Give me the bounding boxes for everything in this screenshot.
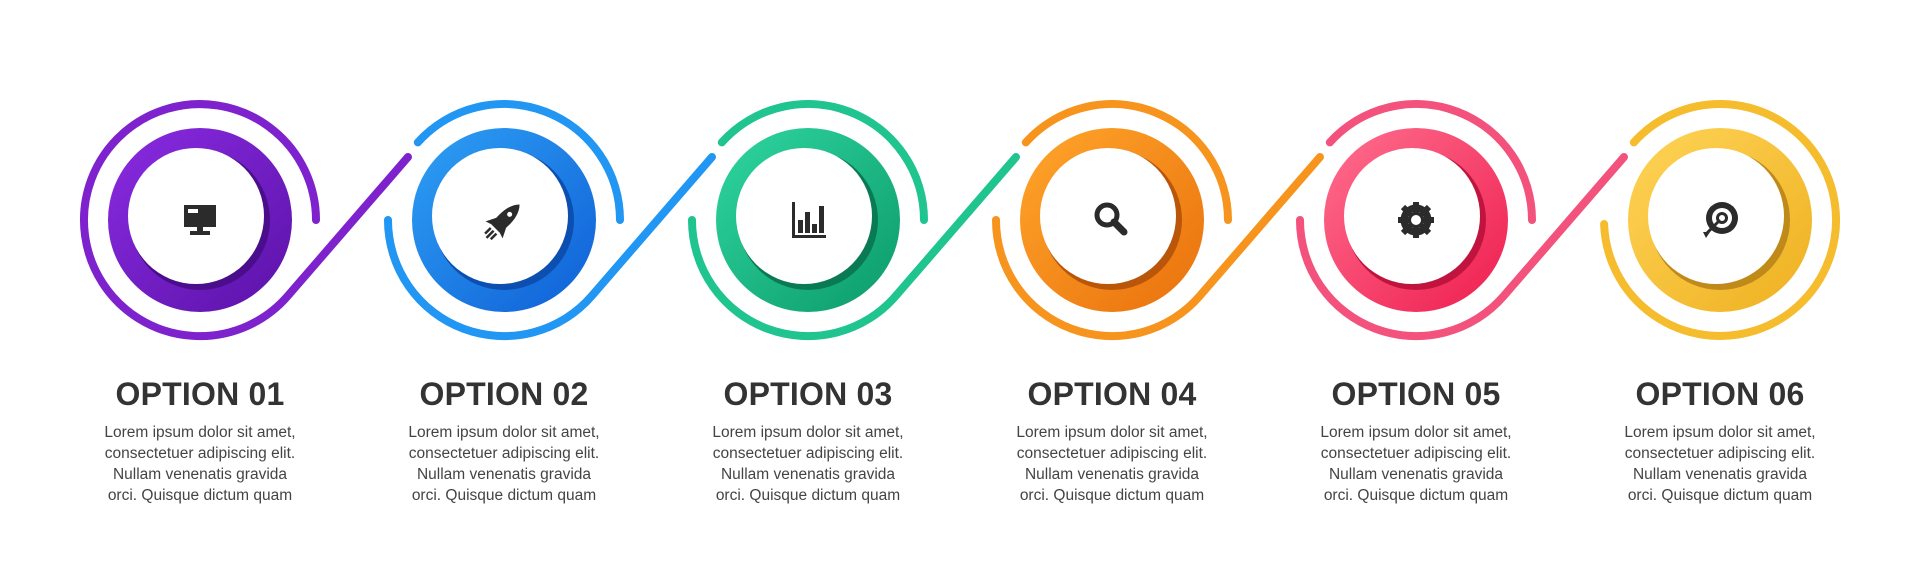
text: option 04: Lorem ipsum dolor sit amet, bbox=[1016, 424, 1208, 441]
icon: magnifier bbox=[1097, 205, 1124, 232]
text: option 04: Nullam venenatis gravida bbox=[1025, 466, 1199, 483]
text: option 06: Lorem ipsum dolor sit amet, bbox=[1624, 424, 1816, 441]
text: option 06: OPTION 06 bbox=[1636, 376, 1804, 412]
text: option 04 bbox=[1016, 376, 1208, 504]
text: option 04: OPTION 04 bbox=[1028, 376, 1196, 412]
text: option 01: Nullam venenatis gravida bbox=[113, 466, 287, 483]
ring 1 bbox=[108, 128, 292, 312]
text: option 05: Lorem ipsum dolor sit amet, bbox=[1320, 424, 1512, 441]
connector arcs 5 bbox=[1300, 104, 1624, 336]
text: option 02: Lorem ipsum dolor sit amet, bbox=[408, 424, 600, 441]
text: option 02 bbox=[408, 376, 600, 504]
icon: bar chart bbox=[792, 202, 826, 238]
text: option 02: Nullam venenatis gravida bbox=[417, 466, 591, 483]
text: option 01 bbox=[104, 376, 296, 504]
ring 4 bbox=[1020, 128, 1204, 312]
icon: target bbox=[1703, 202, 1738, 238]
text: option 04: orci. Quisque dictum quam bbox=[1020, 487, 1204, 504]
text: option 03: Lorem ipsum dolor sit amet, bbox=[712, 424, 904, 441]
text: option 03 bbox=[712, 376, 904, 504]
text: option 05: orci. Quisque dictum quam bbox=[1324, 487, 1508, 504]
connector arc 1 bbox=[84, 104, 408, 336]
text: option 06: orci. Quisque dictum quam bbox=[1628, 487, 1812, 504]
ring 3 bbox=[716, 128, 900, 312]
connector arcs 3 bbox=[692, 104, 1016, 336]
text: option 03: consectetuer adipiscing elit. bbox=[713, 445, 903, 462]
text: option 03: Nullam venenatis gravida bbox=[721, 466, 895, 483]
connector arc 6 bbox=[1604, 104, 1836, 336]
connector arcs 2 bbox=[388, 104, 712, 336]
connector arcs 4 bbox=[996, 104, 1320, 336]
text: option 06 bbox=[1624, 376, 1816, 504]
text: option 06: consectetuer adipiscing elit. bbox=[1625, 445, 1815, 462]
icon: monitor bbox=[184, 205, 216, 235]
text: option 04: consectetuer adipiscing elit. bbox=[1017, 445, 1207, 462]
text: option 01: OPTION 01 bbox=[116, 376, 284, 412]
text: option 03: orci. Quisque dictum quam bbox=[716, 487, 900, 504]
text: option 06: Nullam venenatis gravida bbox=[1633, 466, 1807, 483]
text: option 02: consectetuer adipiscing elit. bbox=[409, 445, 599, 462]
text: option 05: consectetuer adipiscing elit. bbox=[1321, 445, 1511, 462]
text: option 02: orci. Quisque dictum quam bbox=[412, 487, 596, 504]
text: option 05: Nullam venenatis gravida bbox=[1329, 466, 1503, 483]
text: option 01: consectetuer adipiscing elit. bbox=[105, 445, 295, 462]
text: option 02: OPTION 02 bbox=[420, 376, 588, 412]
text: option 03: OPTION 03 bbox=[724, 376, 892, 412]
text: option 05 bbox=[1320, 376, 1512, 504]
icon: gear bbox=[1398, 202, 1434, 238]
ring 5 bbox=[1324, 128, 1508, 312]
ring 2 bbox=[412, 128, 596, 312]
text: option 01: orci. Quisque dictum quam bbox=[108, 487, 292, 504]
text: option 01: Lorem ipsum dolor sit amet, bbox=[104, 424, 296, 441]
text: option 05: OPTION 05 bbox=[1332, 376, 1500, 412]
icon: rocket bbox=[478, 196, 528, 246]
ring 6 bbox=[1628, 128, 1812, 312]
